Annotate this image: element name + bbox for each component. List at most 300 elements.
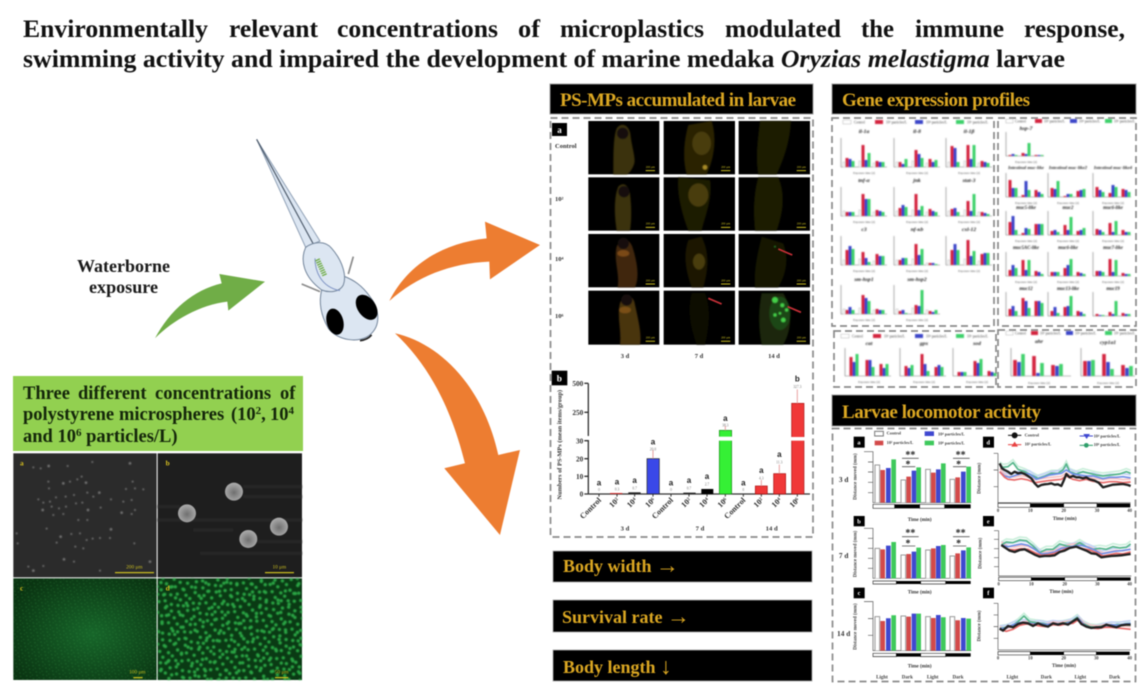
line chart: distance 3 d: Time (min)	[1053, 517, 1077, 522]
bar chart: PS-MP numbers: 2.7	[705, 482, 709, 486]
bar chart: distance 14 d	[853, 602, 971, 670]
bar chart: distance 7 d: Distance moved (mm)	[853, 530, 858, 577]
bar chart: PS-MP numbers: 0.7	[687, 486, 691, 490]
line chart: distance 14 d: 30	[1094, 657, 1099, 662]
bar chart: PS-MP numbers: 10⁴	[770, 495, 784, 509]
row and column labels: Control	[555, 143, 577, 150]
line chart: distance 3 d: 40	[1127, 509, 1133, 514]
chart: il-8: il-8	[913, 129, 921, 135]
chart: jnk: jnk	[912, 178, 921, 184]
bar chart: PS-MP numbers: a	[741, 478, 746, 487]
bar chart: PS-MP numbers: 10⁶	[643, 495, 657, 509]
chart: muc19: muc19	[1106, 287, 1120, 292]
line chart: distance 7 d: 20	[1062, 582, 1068, 587]
chart: muc5AC-like: muc5AC-like	[1013, 246, 1040, 251]
chart: stat-3: stat-3	[962, 178, 976, 184]
bar chart: PS-MP numbers: Numbers of PS-MPs (mean items/group)	[557, 390, 564, 499]
chart: cyp1a1: cyp1a1	[1100, 340, 1116, 346]
bar chart: PS-MP numbers: a	[651, 437, 656, 446]
chart: cyp1a1	[1081, 340, 1135, 385]
legend: Control	[854, 120, 865, 124]
chart: intestinal muc-like2: Exposure time (d)	[1057, 201, 1079, 205]
chart: il-1b: il-1β	[964, 129, 974, 135]
outcome: survival rate	[553, 600, 812, 632]
row and column labels: 3 d	[621, 353, 630, 360]
chart: il-1a: il-1a	[859, 129, 869, 135]
icon: medaka larva	[257, 139, 382, 341]
legend: 10⁴ particles/L	[926, 334, 947, 338]
line chart: distance 14 d: 40	[1127, 657, 1133, 662]
panel: mucin genes	[998, 118, 1136, 326]
chart: muc13-like: muc13-like	[1057, 287, 1080, 292]
heading: three concentrations: Three	[23, 384, 70, 404]
day labels: 7 d	[839, 551, 848, 560]
micrograph d: fluorescence high magnification: d	[166, 584, 170, 593]
legend: locomotor lines: 10² particles/L	[1025, 441, 1051, 446]
micrograph grid: larvae fluorescence: 200 μm	[797, 336, 807, 340]
light and dark labels: Light	[1006, 675, 1018, 680]
micrograph grid: larvae fluorescence: 200 μm	[721, 222, 731, 226]
micrograph grid: larvae fluorescence	[588, 121, 810, 345]
light and dark labels: Light	[927, 675, 939, 680]
panel: antioxidant genes	[834, 331, 999, 387]
chart: il-1a: Exposure time (d)	[853, 171, 875, 175]
line chart: distance 14 d: Distance (mm)	[978, 610, 983, 642]
chart: cat	[845, 341, 891, 384]
arrow: larva to developmental endpoints	[395, 333, 520, 535]
heading: three concentrations: 4	[288, 405, 294, 417]
micrograph grid: larvae fluorescence: 200 μm	[646, 336, 656, 340]
chart: sod	[953, 341, 999, 384]
bar chart: PS-MP numbers: a	[632, 476, 637, 485]
bar chart: PS-MP numbers: 10⁴	[625, 495, 639, 509]
row and column labels	[555, 143, 780, 360]
panel labels: f	[987, 590, 990, 597]
chart: intestinal muc-like2	[1048, 165, 1088, 205]
line chart: distance 7 d: 40	[1127, 582, 1133, 587]
legend: 10² particles/L	[886, 120, 907, 124]
panel: xenobiotic genes	[998, 330, 1136, 387]
heading: PS-MPs accumulated	[550, 84, 813, 114]
line chart: distance 3 d: 0	[997, 509, 1000, 514]
bar chart: PS-MP numbers: 10²	[752, 495, 766, 509]
heading: three concentrations: microspheres	[119, 405, 224, 425]
chart: il-1a	[841, 129, 887, 175]
light and dark labels: Dark	[1041, 675, 1052, 680]
legend: 10² particles/L	[884, 334, 905, 338]
light and dark labels: Light	[1074, 675, 1086, 680]
row and column labels: 14 d	[768, 353, 780, 360]
chart: cxcl-12	[946, 227, 992, 273]
heading: three concentrations: of	[280, 384, 296, 404]
title: immune	[915, 14, 1004, 43]
bar chart: PS-MP numbers: 0	[742, 488, 744, 492]
legend: locomotor bars: 10⁶ particles/L	[938, 440, 965, 445]
chart: muc6-like: muc6-like	[1103, 206, 1124, 211]
title	[23, 14, 1125, 73]
chart: intestinal muc-like	[1006, 165, 1044, 205]
chart: muc6-like repeat	[1048, 246, 1086, 284]
bar chart: distance 7 d	[853, 528, 971, 595]
chart: tnf-a: tnf-α	[858, 178, 871, 184]
micrograph grid: larvae fluorescence: 200 μm	[646, 278, 656, 282]
chart: il-8: Exposure time (d)	[906, 171, 928, 175]
bar chart: PS-MP numbers: 500	[572, 379, 584, 388]
legend	[841, 334, 988, 338]
micrograph b: SEM close-up spheres: 10 μm	[272, 564, 287, 570]
micrograph a: SEM overview	[13, 453, 157, 577]
label: waterborne exposure: exposure	[89, 277, 158, 297]
chart: sm-hsp1: Exposure time (d)	[853, 318, 875, 322]
micrograph c: fluorescence low magnification	[13, 578, 157, 680]
title: modulated	[725, 14, 841, 43]
bar chart: PS-MP numbers: 14 d	[766, 525, 778, 532]
micrograph grid: larvae fluorescence: 200 μm	[721, 165, 731, 169]
outcome: body width: →	[656, 553, 679, 578]
legend: Control	[1015, 332, 1026, 336]
line chart: distance 14 d	[978, 603, 1133, 669]
line chart: distance 7 d: Time (min)	[1049, 590, 1074, 595]
bar chart: PS-MP numbers: 327.3	[793, 385, 802, 389]
micrograph b: SEM close-up spheres: b	[166, 459, 170, 468]
chart: cat: Exposure time (d)	[858, 380, 880, 384]
label: a: a	[557, 125, 562, 135]
label: waterborne exposure	[77, 256, 170, 297]
legend: locomotor lines: 10⁴ particles/L	[1094, 434, 1120, 439]
bar chart: distance 3 d: *	[956, 459, 961, 470]
outcome: body length: Body length	[563, 657, 656, 677]
heading: gene expression profiles: Gene expression profiles	[842, 90, 1030, 111]
chart: intestinal muc-like4: Exposure time (d)	[1102, 201, 1124, 205]
bar chart: PS-MP numbers: a	[705, 472, 710, 481]
heading: larvae locomotor activity	[832, 395, 1136, 426]
line chart: distance 3 d: 20	[1061, 509, 1067, 514]
legend: 10² particles/L	[1040, 332, 1061, 336]
chart: sm-hsp1	[841, 277, 887, 322]
outcome: survival rate: Survival rate	[562, 607, 662, 627]
micrograph grid: larvae fluorescence: 200 μm	[721, 336, 731, 340]
legend: 10⁴ particles/L	[926, 120, 947, 124]
day labels: 14 d	[837, 629, 850, 638]
micrograph grid: larvae fluorescence: 200 μm	[646, 165, 656, 169]
legend	[843, 120, 988, 124]
chart: muc7-like	[1093, 246, 1131, 284]
heading: three concentrations	[13, 376, 303, 451]
bar chart: distance 3 d: *	[905, 459, 910, 470]
heading: three concentrations: (10	[231, 405, 256, 425]
light and dark labels: Dark	[902, 675, 913, 680]
legend: locomotor bars: 10⁴ particles/L	[938, 431, 965, 436]
bar chart: PS-MP numbers: 10	[576, 472, 584, 481]
bar chart: distance 7 d: **	[905, 528, 915, 539]
chart: muc13-like	[1048, 287, 1086, 316]
chart: nf-kb	[894, 227, 940, 273]
panel labels: e	[987, 518, 990, 525]
panel labels: c	[858, 590, 861, 597]
bar chart: PS-MP numbers: 0	[580, 490, 584, 499]
chart: stat-3	[946, 178, 992, 224]
chart: tnf-a: Exposure time (d)	[853, 220, 875, 224]
legend: 10⁶ particles/L	[1114, 120, 1135, 124]
panel: locomotor dashed box	[832, 428, 1136, 682]
bar chart: PS-MP numbers: 250	[572, 408, 584, 417]
outcome: body length	[553, 650, 812, 681]
chart: muc5AC-like	[1006, 246, 1044, 284]
legend: locomotor bars: Control	[887, 431, 902, 436]
line chart: distance 7 d: 0	[997, 582, 1000, 587]
bar chart: distance 3 d: **	[956, 450, 966, 461]
micrograph d: fluorescence high magnification: 50 μm	[275, 669, 289, 675]
arrow: waterborne exposure into larva	[155, 274, 265, 338]
bar chart: PS-MP numbers: 0.7	[632, 486, 637, 490]
chart: cxcl-12: cxl-12	[962, 227, 976, 233]
bar chart: PS-MP numbers: Control	[722, 495, 748, 521]
title: concentrations	[337, 14, 498, 43]
line chart: distance 7 d: 30	[1095, 582, 1100, 587]
bar chart: PS-MP numbers: a	[615, 478, 620, 487]
panel labels	[854, 437, 994, 598]
bar chart: PS-MP numbers: b	[795, 374, 800, 383]
chart: sm-hsp2: Exposure time (d)	[906, 318, 928, 322]
outcome: body width	[553, 551, 812, 582]
bar chart: distance 7 d: *	[956, 539, 961, 550]
chart: muc5-like	[1006, 206, 1044, 243]
outcome: body width: Body width	[563, 556, 652, 576]
legend: 10⁶ particles/L	[1114, 332, 1135, 336]
legend	[1006, 119, 1135, 124]
chart: gpx: Exposure time (d)	[913, 380, 935, 384]
chart: ahr: ahr	[1035, 339, 1044, 345]
label: waterborne exposure: Waterborne	[77, 256, 170, 276]
bar chart: distance 7 d: Time (min)	[908, 590, 932, 595]
light and dark labels	[876, 675, 1120, 680]
bar chart: distance 3 d: **	[905, 450, 915, 461]
title: the	[861, 14, 894, 43]
row and column labels: 7 d	[695, 353, 704, 360]
day labels	[837, 475, 850, 638]
title: relevant	[229, 14, 318, 43]
legend: 10⁴ particles/L	[1079, 120, 1100, 124]
chart: muc7-like: muc7-like	[1103, 246, 1124, 251]
bar chart: PS-MP numbers: Control	[578, 495, 604, 521]
micrograph c: fluorescence low magnification: 100 μm	[129, 669, 146, 675]
bar chart: PS-MP numbers: 0	[598, 488, 600, 492]
heading: PS-MPs accumulated: PS-MPs accumulated in larvae	[560, 90, 796, 111]
legend: locomotor lines: Control	[1025, 433, 1040, 438]
bar chart: PS-MP numbers: Control	[650, 495, 676, 521]
chart: muc5-like: muc5-like	[1016, 206, 1037, 211]
chart: jnk: Exposure time (d)	[906, 220, 928, 224]
legend	[1006, 331, 1135, 336]
heading: three concentrations: and 10	[23, 427, 76, 447]
micrograph d: fluorescence high magnification	[158, 578, 302, 680]
chart: tnf-a	[841, 178, 887, 224]
chart: ahr: Exposure time (d)	[1028, 381, 1050, 385]
bar chart: PS-MP numbers: a	[723, 414, 728, 423]
micrograph grid: larvae fluorescence: 200 μm	[721, 278, 731, 282]
bar chart: PS-MP numbers: 10²	[679, 495, 693, 509]
heading: three concentrations: 10	[270, 405, 288, 425]
chart: muc12	[1006, 287, 1044, 316]
bar chart: PS-MP numbers: 10²	[607, 495, 621, 509]
line chart: distance 14 d: 10	[1028, 657, 1033, 662]
legend: 10⁶ particles/L	[967, 120, 988, 124]
legend: locomotor lines: 10⁶ particles/L	[1094, 442, 1120, 447]
line chart: distance 7 d	[978, 531, 1133, 595]
chart: cxcl-12: Exposure time (d)	[958, 269, 980, 273]
title: microplastics	[560, 14, 704, 43]
bar chart: PS-MP numbers: 7 d	[696, 525, 705, 532]
chart: muc6-like	[1093, 206, 1131, 243]
row and column labels: 10⁶	[555, 313, 564, 320]
line chart: distance 14 d: 0	[997, 657, 1000, 662]
micrograph grid: larvae fluorescence: 200 μm	[646, 222, 656, 226]
chart: sm-hsp1: sm-hsp1	[853, 277, 874, 283]
legend: Control	[852, 334, 863, 338]
chart: muc5-like: Exposure time (d)	[1015, 239, 1037, 243]
bar chart: PS-MP numbers: a	[669, 478, 674, 487]
chart: muc6-like: Exposure time (d)	[1102, 239, 1124, 243]
title: Environmentally	[23, 14, 208, 43]
line chart: distance 7 d: Distance (mm)	[978, 537, 983, 569]
line chart: distance 3 d: 30	[1095, 509, 1100, 514]
bar chart: PS-MP numbers: a	[687, 476, 692, 485]
chart: muc2: muc2	[1063, 206, 1074, 211]
bar chart: PS-MP numbers: 0	[670, 488, 672, 492]
chart: nf-kb: Exposure time (d)	[906, 269, 928, 273]
bar chart: PS-MP numbers	[552, 371, 810, 532]
heading: three concentrations: polystyrene	[23, 405, 114, 425]
chart: sm-hsp2: sm-hsp2	[906, 277, 927, 283]
heading: three concentrations: concentrations	[155, 384, 271, 404]
chart: muc2: Exposure time (d)	[1057, 239, 1079, 243]
bar chart: distance 14 d: Time (min)	[908, 665, 932, 670]
legend: 10⁴ particles/L	[1075, 332, 1096, 336]
chart: stat-3: Exposure time (d)	[958, 220, 980, 224]
line chart: distance 3 d	[978, 453, 1133, 522]
chart: gpx	[900, 341, 946, 384]
micrographs	[13, 453, 302, 680]
heading: three concentrations: 2	[256, 405, 262, 417]
legend: 10⁶ particles/L	[967, 334, 988, 338]
micrograph grid: larvae fluorescence: 200 μm	[797, 278, 807, 282]
chart: ahr	[1011, 339, 1071, 385]
chart: muc6-like repeat: Exposure time (d)	[1057, 280, 1079, 284]
bar chart: distance 3 d	[853, 450, 971, 523]
chart: muc2	[1048, 206, 1086, 243]
bar chart: PS-MP numbers: a	[777, 450, 782, 459]
chart: jnk	[894, 178, 940, 224]
bar chart: distance 3 d: Time (min)	[908, 518, 932, 523]
chart: c3: c3	[861, 227, 867, 233]
chart: cyp1a1: Exposure time (d)	[1097, 381, 1119, 385]
bar chart: distance 7 d: *	[905, 539, 910, 550]
chart: hsp-7: hsp-7	[1020, 126, 1033, 132]
bar chart: PS-MP numbers: b	[557, 375, 562, 385]
heading: three concentrations: different	[78, 384, 147, 404]
chart: muc6-like repeat: muc6-like	[1058, 246, 1079, 251]
heading: three concentrations: ,	[261, 405, 266, 425]
chart: intestinal muc-like4	[1093, 165, 1133, 205]
bar chart: PS-MP numbers: 10⁶	[716, 495, 730, 509]
panel labels: b	[857, 518, 861, 525]
light and dark labels: Light	[876, 675, 888, 680]
legend: 10² particles/L	[1044, 120, 1065, 124]
chart: il-1b: Exposure time (d)	[958, 171, 980, 175]
bar chart: PS-MP numbers: 10⁶	[788, 495, 802, 509]
chart: sod: Exposure time (d)	[966, 380, 988, 384]
chart: c3: Exposure time (d)	[853, 269, 875, 273]
chart: muc5AC-like: Exposure time (d)	[1015, 280, 1037, 284]
row and column labels: 10⁴	[555, 256, 564, 263]
chart: muc7-like: Exposure time (d)	[1102, 280, 1124, 284]
bar chart: distance 14 d: Distance moved (mm)	[853, 603, 858, 650]
bar chart: PS-MP numbers: 4.3	[759, 476, 764, 480]
chart: il-1b	[946, 129, 992, 175]
heading: larvae locomotor activity: Larvae locomotor activity	[842, 402, 1042, 423]
chart: hsp-7	[1006, 126, 1044, 164]
heading: three concentrations: 6	[76, 427, 82, 439]
line chart: distance 3 d: Distance (mm)	[978, 462, 983, 494]
panel: polystyrene microspheres	[13, 376, 303, 680]
bar chart: PS-MP numbers: 10⁴	[697, 495, 711, 509]
chart: sod: sod	[972, 341, 981, 347]
line chart: distance 14 d: 20	[1061, 657, 1067, 662]
chart: nf-kb: nf-κb	[911, 227, 923, 233]
micrograph a: SEM overview: a	[20, 459, 24, 468]
bar chart: PS-MP numbers: 20.0	[650, 448, 656, 452]
micrograph a: SEM overview: 200 μm	[126, 564, 143, 570]
light and dark labels: Dark	[952, 675, 964, 680]
line chart: distance 7 d: 10	[1029, 582, 1034, 587]
line chart: distance 14 d: Time (min)	[1052, 664, 1076, 669]
chart: intestinal muc-like2: Intestinal muc-like2	[1048, 165, 1088, 170]
outcome: survival rate: →	[667, 604, 690, 629]
heading: gene expression profiles	[832, 84, 1136, 114]
chart: gpx: gpx	[919, 341, 928, 347]
chart: il-8	[894, 129, 940, 175]
legend: Control	[1015, 120, 1026, 124]
panel labels: a	[857, 439, 861, 446]
chart: intestinal muc-like4: Intestinal muc-like4	[1093, 165, 1133, 170]
legend: locomotor bars: 10² particles/L	[887, 440, 913, 445]
legend: locomotor lines	[1008, 432, 1120, 448]
chart: cat: cat	[866, 341, 873, 347]
bar chart: PS-MP numbers: 0.3	[615, 487, 619, 491]
locomotor figures	[837, 431, 1133, 680]
chart: intestinal muc-like: Exposure time (d)	[1015, 201, 1037, 205]
micrograph c: fluorescence low magnification: c	[20, 584, 24, 593]
bar chart: PS-MP numbers: 38.3	[722, 424, 729, 428]
label: a	[552, 123, 567, 136]
day labels: 3 d	[839, 475, 848, 484]
bar chart: distance 3 d: Distance moved (mm)	[853, 453, 858, 500]
bar chart: PS-MP numbers: a	[597, 478, 602, 487]
arrow: larva to accumulation panel	[389, 222, 540, 301]
heading: three concentrations: particles/L)	[81, 427, 178, 447]
panel: immune genes	[832, 118, 994, 326]
bar chart: PS-MP numbers: 3 d	[621, 525, 630, 532]
chart: sm-hsp2	[894, 277, 940, 322]
line chart: distance 3 d: 10	[1028, 509, 1033, 514]
bar chart: distance 7 d: **	[956, 528, 966, 539]
title: swimming activity and impaired the development of marine medaka Oryzias melastigma larvae	[23, 44, 1065, 73]
chart: muc19	[1093, 287, 1131, 316]
legend: locomotor bars	[875, 431, 965, 445]
panel: accumulation dashed box	[550, 118, 813, 537]
micrograph grid: larvae fluorescence: 200 μm	[797, 165, 807, 169]
chart: muc12: muc12	[1019, 287, 1033, 292]
